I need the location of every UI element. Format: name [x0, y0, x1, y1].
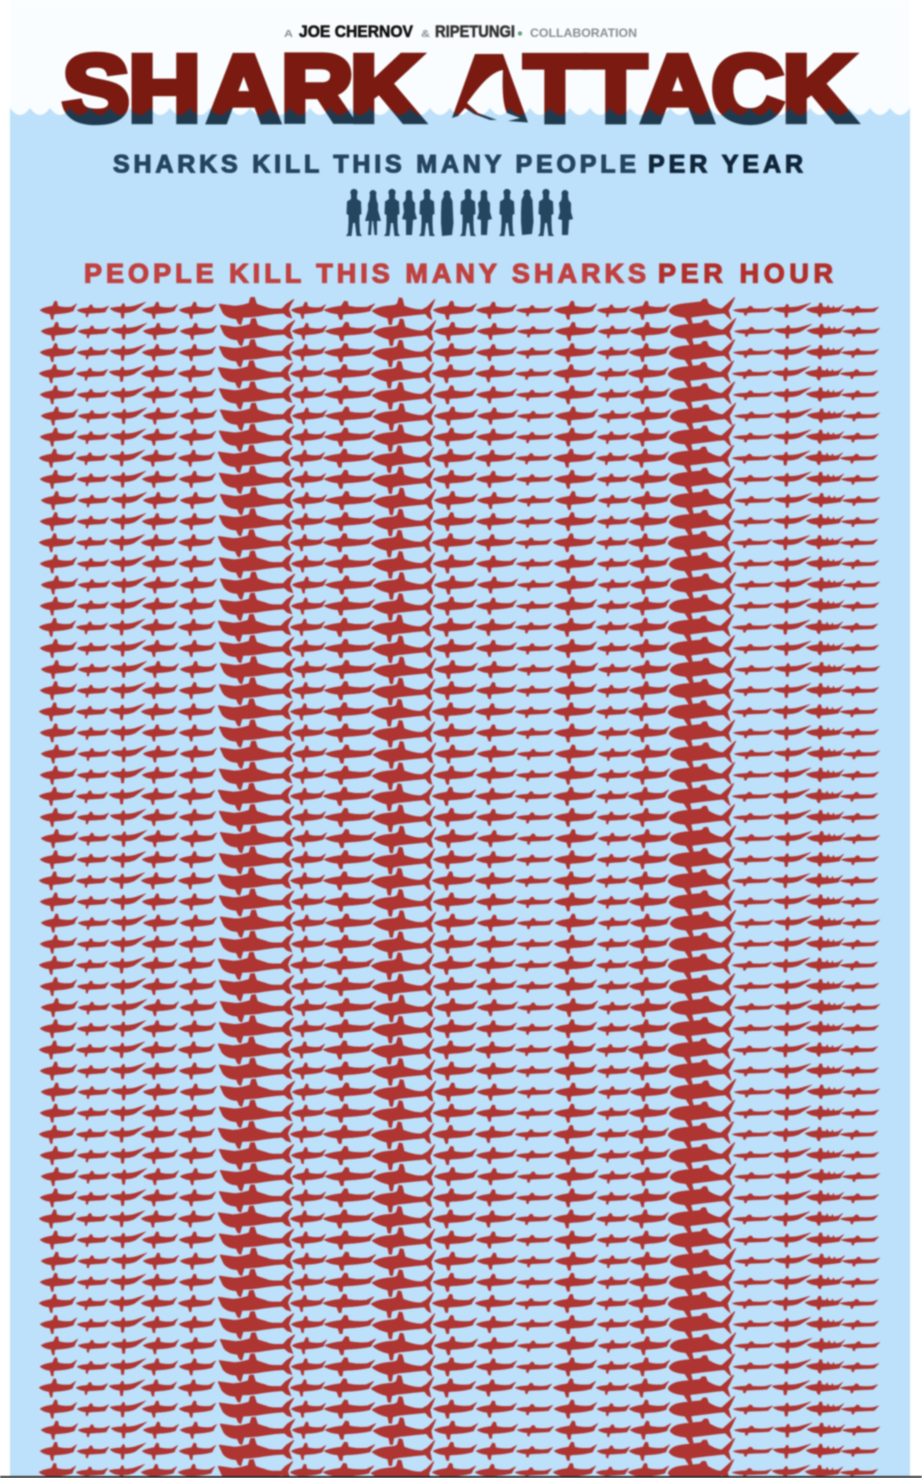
bottom dark edge — [0, 1476, 922, 1478]
heading: sharks kill per year: SHARKS KILL THIS MANY PEOPLE — [113, 150, 636, 178]
credit line: RIPETUNGI — [435, 23, 515, 41]
credit line: A — [284, 29, 293, 40]
credit line: & — [421, 29, 430, 40]
heading: sharks kill per year: PER YEAR — [648, 150, 803, 178]
credit line: COLLABORATION — [530, 28, 637, 40]
title word: TTACK: TTACK — [524, 34, 855, 141]
heading: people kill per hour: PER HOUR — [658, 258, 833, 288]
title word: SHARK: SHARK — [62, 34, 423, 141]
chart: grid of shark silhouettes — [39, 297, 880, 1478]
heading: people kill per hour: PEOPLE KILL THIS MANY SHARKS — [84, 258, 646, 288]
icon: A with shark fin — [452, 54, 528, 122]
credit line — [284, 23, 637, 41]
credit line: JOE CHERNOV — [299, 23, 413, 41]
title: SHARK ATTACK — [62, 34, 855, 141]
icon: twelve people silhouettes — [346, 189, 573, 236]
